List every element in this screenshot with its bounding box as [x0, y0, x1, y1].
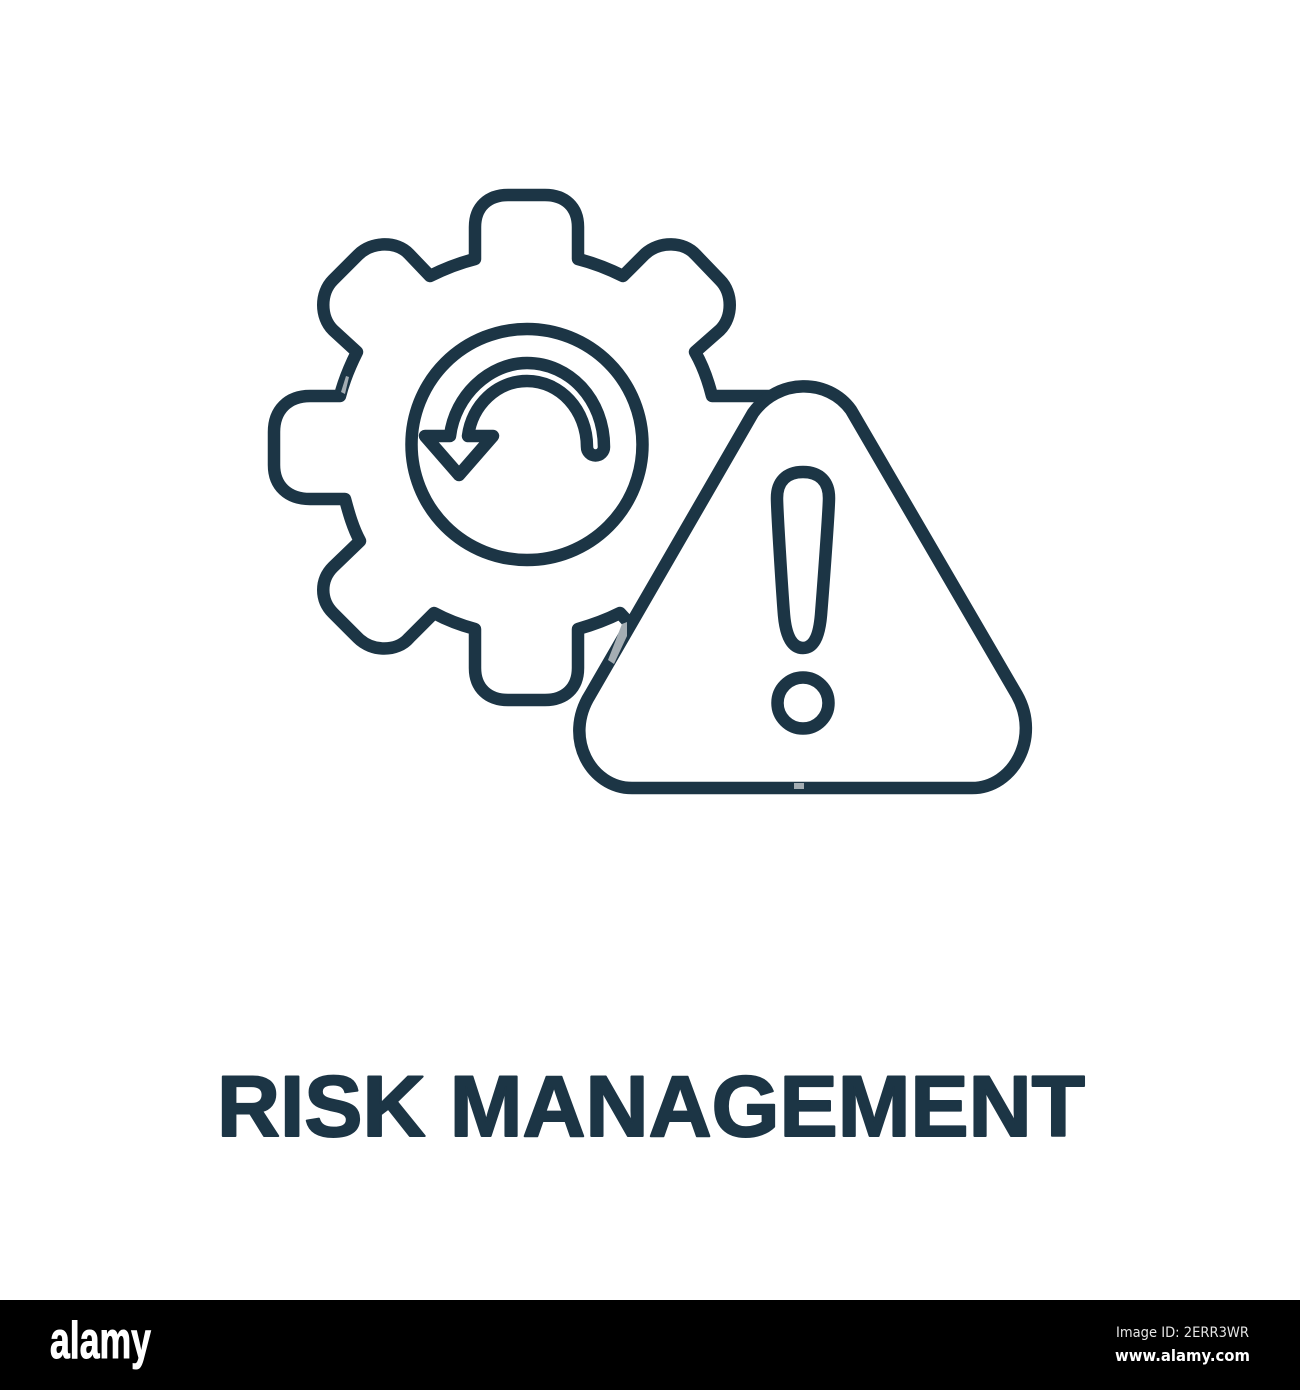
footer bar — [0, 1300, 1300, 1390]
icon: exclamation mark bar — [777, 472, 829, 648]
icon: warning triangle — [579, 386, 1026, 788]
icon: exclamation mark dot — [778, 678, 828, 728]
website url: www.alamy.com — [1115, 1346, 1250, 1365]
watermark fragments — [341, 376, 804, 789]
icon: counter-clockwise arrow — [425, 363, 604, 475]
icon: gear inner circle — [412, 329, 642, 560]
logo: alamy: alamy — [50, 1312, 151, 1370]
title: RISK MANAGEMENT — [217, 1059, 1085, 1155]
image id: Image ID: 2ERR3WR — [1116, 1325, 1249, 1341]
icon: gear outline — [274, 195, 770, 700]
icon: risk management gear and warning — [274, 195, 1026, 788]
